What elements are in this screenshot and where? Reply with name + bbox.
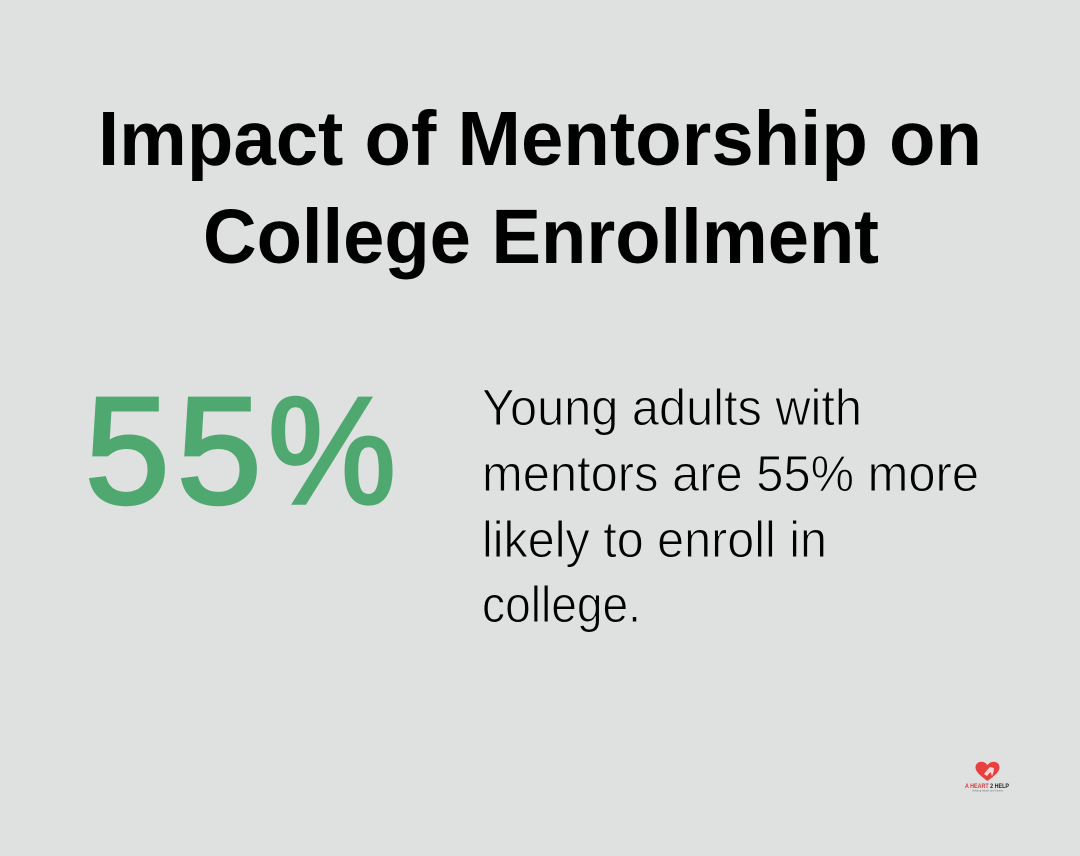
description text: Young adults with <box>482 379 862 436</box>
description text: mentors are 55% more <box>482 445 979 502</box>
big statistic: 55%: % <box>268 366 396 536</box>
description text: college. <box>482 576 641 633</box>
title: College Enrollment <box>203 194 879 280</box>
logo name: A HEART 2 HELP <box>965 783 1010 790</box>
big statistic: 55% <box>85 366 396 536</box>
big statistic: 55%: 5 <box>85 366 170 536</box>
description text: likely to enroll in <box>482 511 827 568</box>
big statistic: 55%: 5 <box>177 366 262 536</box>
title: Impact of Mentorship on <box>98 96 982 182</box>
title <box>98 96 982 280</box>
description text <box>482 379 979 633</box>
logo tagline: Helping hands and hearts <box>972 790 1004 792</box>
logo: A Heart 2 Help <box>965 762 1010 792</box>
icon: heart <box>976 762 1000 781</box>
icon: figures inside heart <box>984 767 994 776</box>
